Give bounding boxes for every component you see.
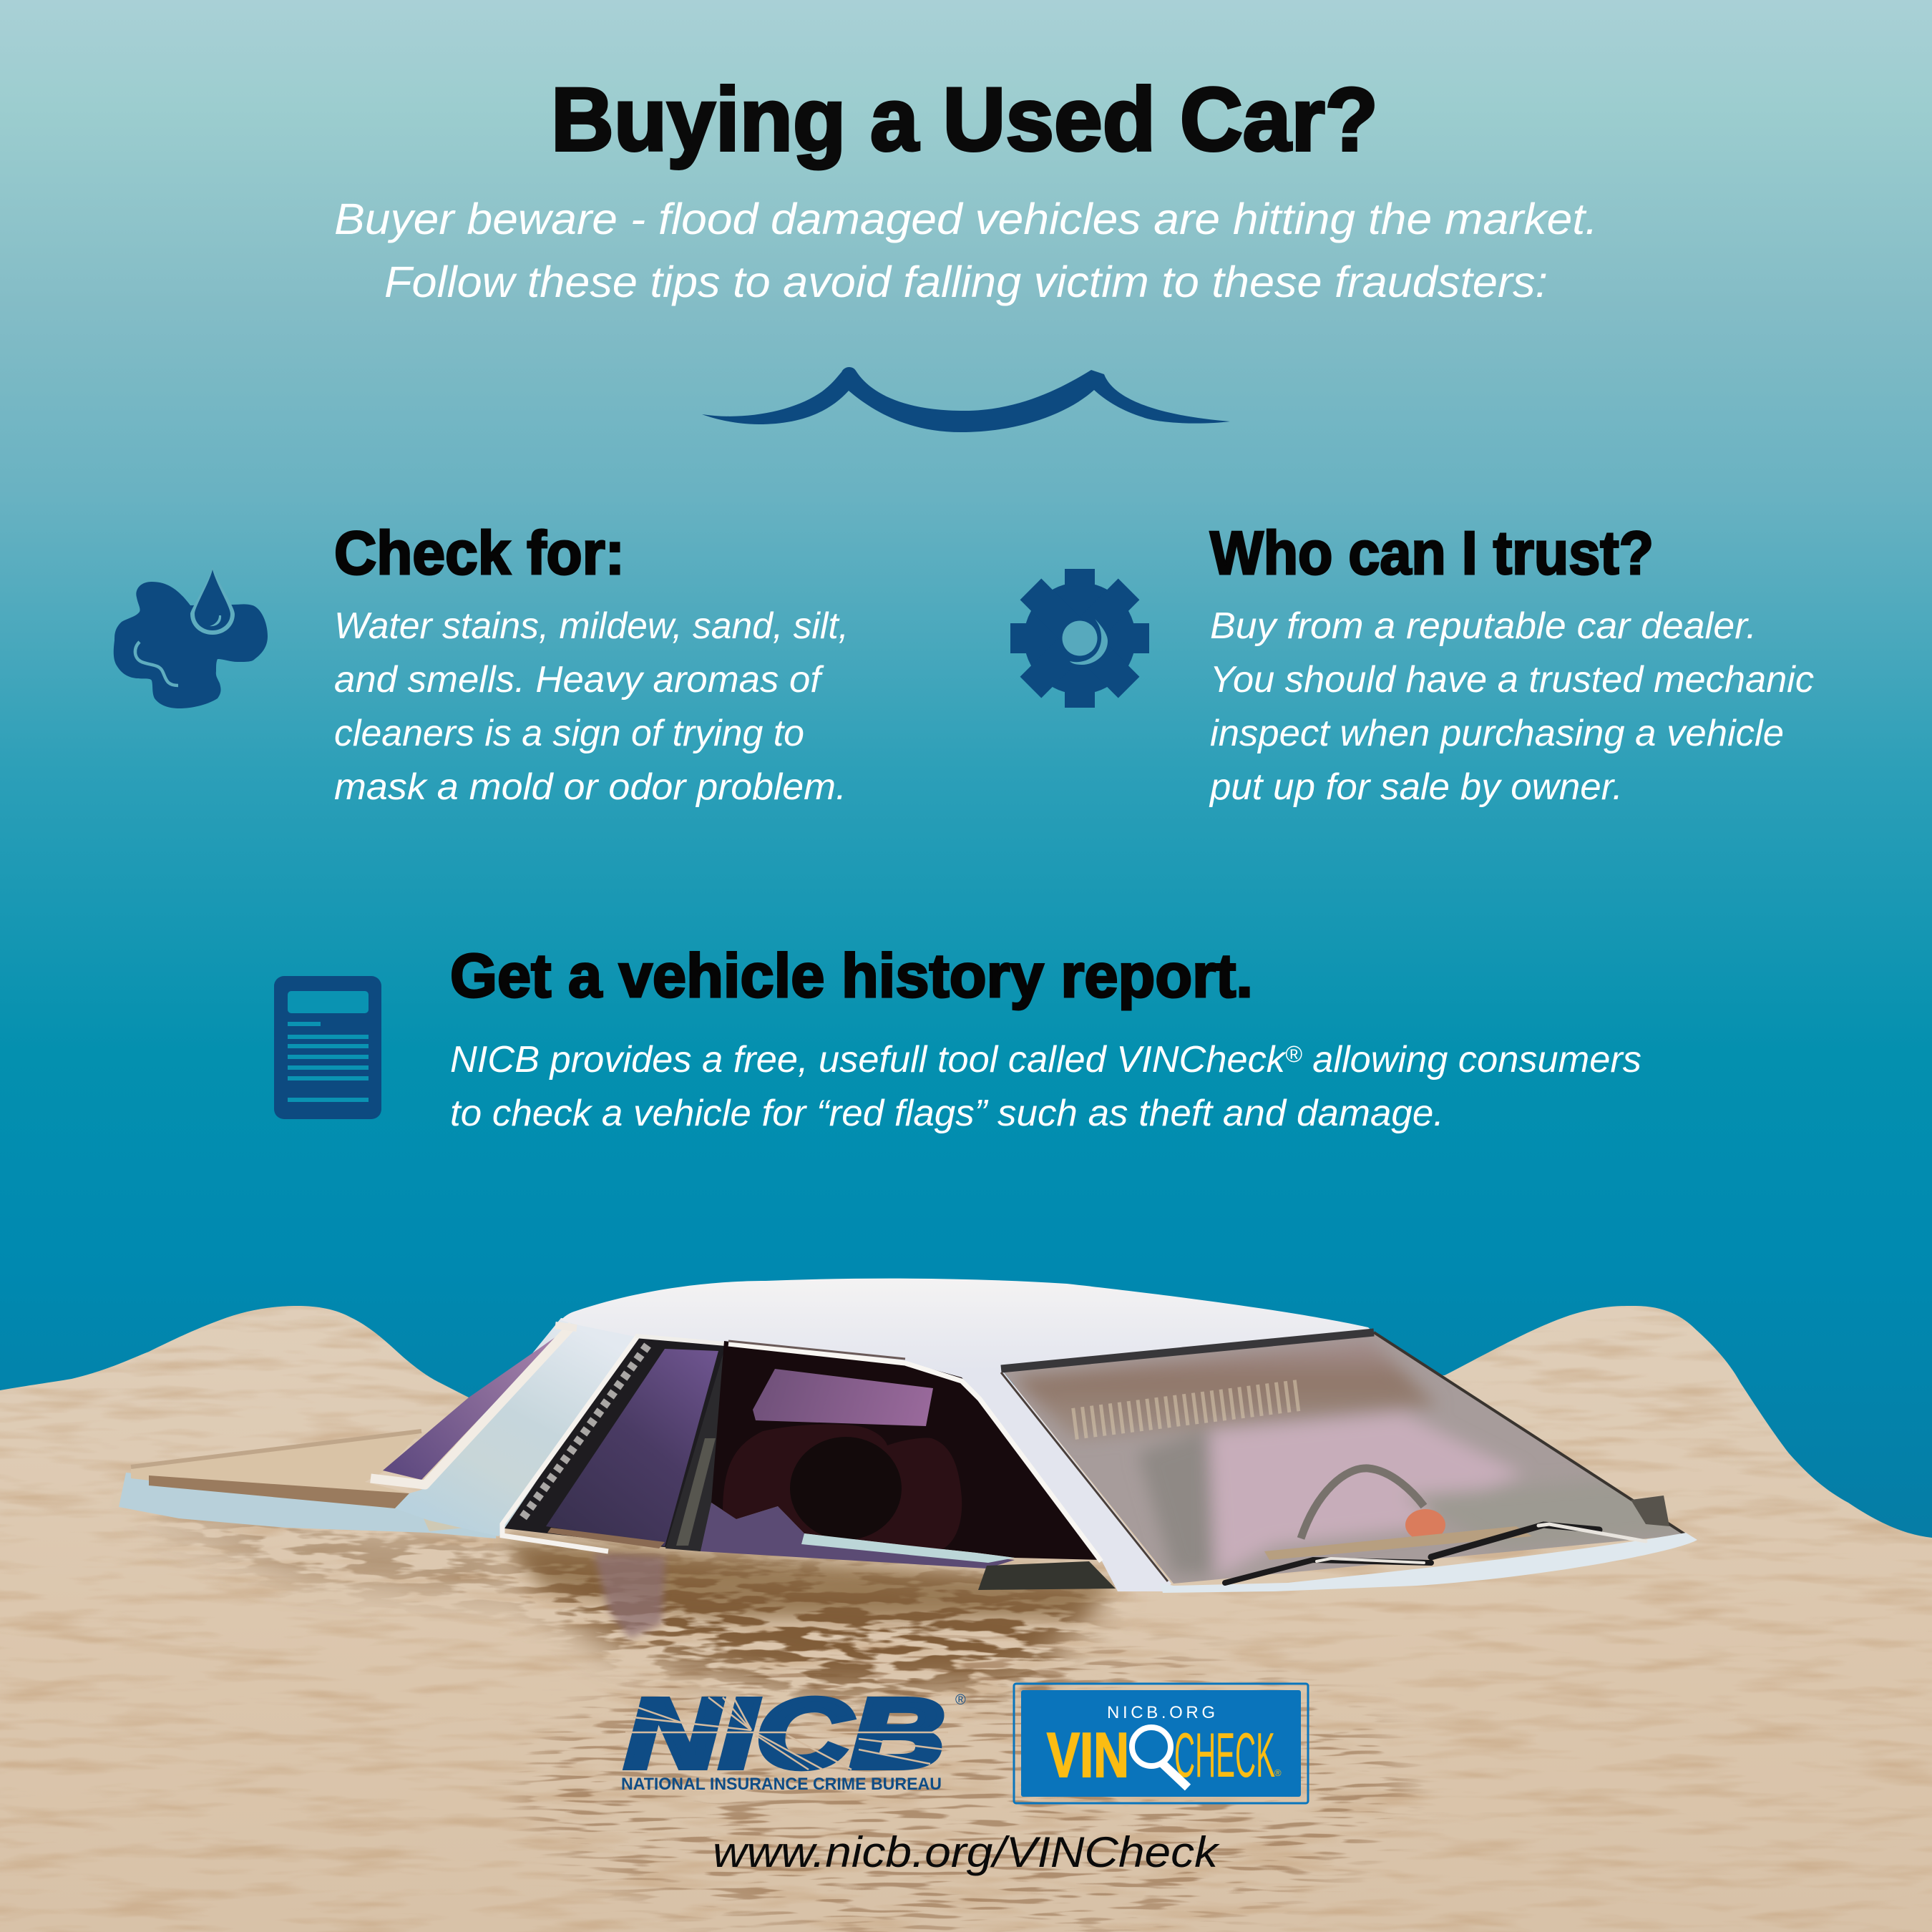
text: who can I trust body: inspect when purchasing a vehicle	[1210, 713, 1784, 754]
text: vehicle history report body: ®	[1285, 1041, 1302, 1067]
subtitle: Buyer beware - flood damaged vehicles are hitting the market.	[334, 195, 1598, 243]
text: who can I trust body: You should have a trusted mechanic	[1210, 659, 1814, 701]
text: check for body: cleaners is a sign of trying to	[334, 713, 804, 754]
NICB registered mark: ®	[955, 1692, 966, 1708]
NICB full name: NATIONAL INSURANCE CRIME BUREAU	[621, 1775, 942, 1794]
icon: wave divider	[702, 367, 1230, 432]
text: check for body: and smells. Heavy aromas of	[334, 659, 824, 701]
VINCheck logo: ®	[1274, 1767, 1282, 1778]
icon: magnifying glass	[1132, 1727, 1188, 1787]
text: who can I trust body: put up for sale by owner.	[1209, 766, 1623, 808]
floodwater	[0, 1288, 1932, 1932]
icon: gear	[1010, 569, 1149, 708]
NICB logo	[621, 1679, 966, 1794]
text: who can I trust body: Buy from a reputable car dealer.	[1210, 605, 1757, 647]
heading: check for: Check for:	[334, 519, 625, 587]
flooded car	[119, 1279, 1697, 1593]
text: who can I trust body	[1209, 605, 1814, 808]
text: check for body	[334, 605, 849, 808]
title: Buying a Used Car?	[551, 70, 1378, 170]
text: vehicle history report body: allowing consumers	[1302, 1039, 1641, 1080]
website url: www.nicb.org/VINCheck	[713, 1828, 1220, 1876]
panel: check for	[114, 519, 849, 808]
car right mirror	[1631, 1496, 1669, 1526]
text: vehicle history report body	[450, 1039, 1641, 1134]
icon: stain and water drop	[114, 567, 268, 708]
icon: report document	[274, 976, 381, 1119]
car open side window and interior	[701, 1341, 1101, 1568]
text: check for body: mask a mold or odor problem.	[334, 766, 847, 808]
VINCheck logo: VIN	[1047, 1719, 1129, 1790]
text: check for body: Water stains, mildew, sand, silt,	[334, 605, 849, 647]
panel: who can I trust	[1010, 519, 1814, 808]
car hood edge	[1160, 1533, 1697, 1593]
subtitle	[334, 195, 1598, 306]
car trunk and rear body	[119, 1431, 501, 1538]
heading: who can I trust: Who can I trust?	[1210, 519, 1654, 587]
text: vehicle history report body: to check a vehicle for “red flags” such as theft and damage.	[450, 1093, 1444, 1134]
subtitle: Follow these tips to avoid falling victim to these fraudsters:	[384, 258, 1548, 306]
VINCheck logo	[1014, 1684, 1308, 1803]
car windshield	[1001, 1332, 1686, 1584]
VINCheck logo: CHECK	[1174, 1719, 1275, 1790]
car roof and windshield pillar	[561, 1279, 1374, 1591]
car wipers	[1225, 1524, 1646, 1583]
car rear pillar and window	[371, 1318, 644, 1536]
heading: vehicle history report: Get a vehicle history report.	[450, 942, 1253, 1010]
car rear door window	[502, 1335, 748, 1551]
panel: vehicle history report	[274, 942, 1641, 1134]
car side mirror	[978, 1561, 1116, 1590]
VINCheck logo: NICB.ORG	[1107, 1703, 1215, 1722]
NICB wordmark: NICB	[625, 1679, 945, 1789]
text: vehicle history report body: NICB provides a free, usefull tool called VINCheck	[450, 1039, 1279, 1080]
